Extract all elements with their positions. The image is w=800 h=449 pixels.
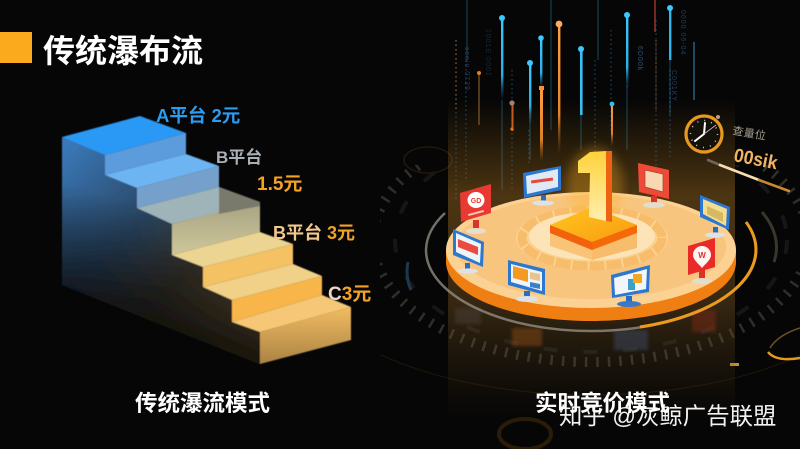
- label: B platform 3 yuan: B平台 3元: [273, 222, 355, 243]
- step 5: [203, 264, 322, 322]
- orange ring: [640, 222, 756, 327]
- faint data text columns: 6D00k: [636, 46, 643, 71]
- step 3 translucent: [137, 187, 260, 255]
- label: C 3 yuan: C3元: [328, 284, 371, 305]
- stopwatch label: 查量位: [731, 123, 767, 143]
- faint decorative rings: [404, 147, 800, 449]
- bidding platform: [426, 147, 756, 331]
- label: B platform: B平台: [216, 147, 262, 167]
- progress bar: [708, 160, 789, 191]
- step 2 light blue: [105, 154, 219, 208]
- monitor: red pin right: [688, 238, 715, 284]
- disc side: [446, 250, 736, 321]
- monitor: blue left: [453, 229, 484, 274]
- inner tick ring: [516, 206, 668, 270]
- label: 1.5 yuan: 1.5元: [257, 174, 302, 195]
- monitor: red sign left: GD: [471, 198, 481, 205]
- title: 传统瀑布流: [43, 33, 203, 69]
- label: A platform: A平台 2元: [156, 105, 240, 126]
- disc top: [446, 192, 736, 308]
- staircase diagram: [62, 116, 351, 364]
- rising light streams: [477, 5, 673, 162]
- monitor: blue top left: [523, 166, 561, 206]
- step 1 blue: [62, 116, 186, 175]
- background dial: [380, 165, 800, 396]
- stair side wall: [62, 137, 260, 364]
- stopwatch value: 00sik: [732, 145, 780, 174]
- faint data text columns: 1001E 0001: [484, 29, 491, 77]
- watermark: 知乎 @灰鲸广告联盟: [559, 403, 776, 429]
- title accent block: [0, 32, 32, 63]
- monitor: red sign left: [460, 184, 491, 234]
- podium top: [550, 207, 637, 242]
- monitor: blue lower right: [611, 265, 650, 307]
- left caption: 传统瀑流模式: [135, 391, 270, 416]
- monitor: red top right: [638, 163, 669, 208]
- faint data text columns: scoio 0729: [463, 47, 470, 91]
- monitor: red pin right: W: [698, 251, 706, 260]
- reflections under platform: [455, 308, 716, 350]
- right caption: 实时竞价模式: [535, 390, 670, 416]
- monitor: blue right: [700, 195, 730, 238]
- step 4: [172, 232, 293, 287]
- step 6: [232, 295, 351, 364]
- gray ring: [426, 213, 756, 331]
- podium band: [550, 225, 592, 250]
- number one glow: [567, 147, 623, 223]
- inner circle: [529, 212, 655, 260]
- monitor: blue lower left: [508, 260, 545, 302]
- amber glow panel: [448, 100, 735, 420]
- dotted data streams: [456, 0, 694, 200]
- number one: [578, 151, 612, 222]
- faint data text columns: 0600 06-04: [679, 10, 686, 55]
- faint data text columns: [463, 10, 686, 102]
- faint data text columns: C001KY: [670, 70, 677, 102]
- podium body: [550, 233, 637, 260]
- stopwatch icon: [686, 115, 722, 152]
